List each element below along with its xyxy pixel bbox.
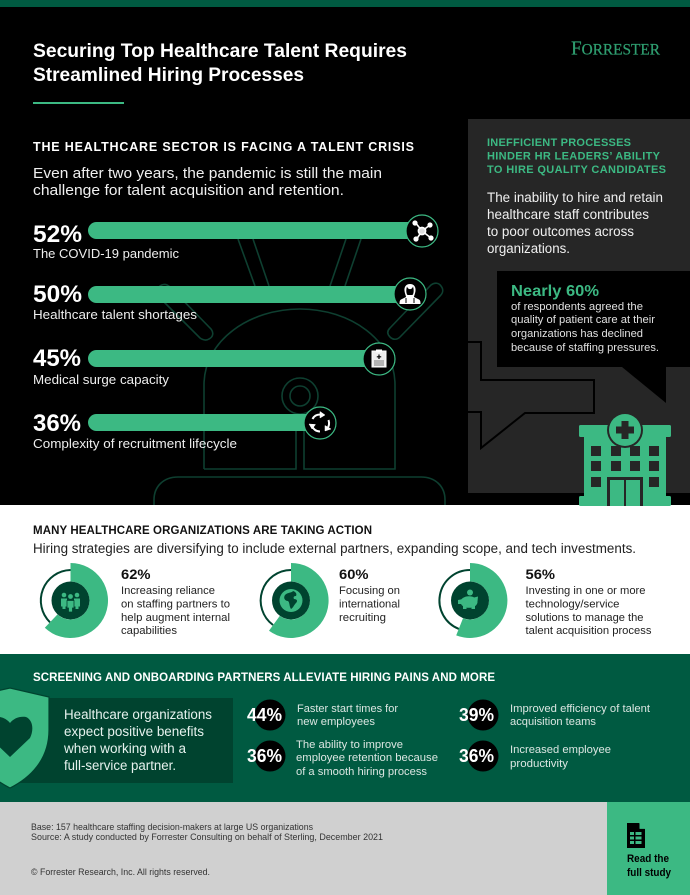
- donut: 60% international recruiting: 60%: [339, 567, 368, 582]
- base and source note: Source: A study conducted by Forrester Consulting on behalf of Sterling, December 2021: [31, 832, 383, 843]
- stat: 44%: new employees: [297, 716, 376, 728]
- stat: 36% productivity: productivity: [510, 758, 569, 770]
- base and source note: [31, 822, 383, 843]
- panel heading: HINDER HR LEADERS’ ABILITY: [487, 150, 661, 162]
- stat: 39%: [459, 700, 650, 730]
- stat: 36% productivity: 36%: [459, 746, 494, 766]
- callout box: full-service partner.: [64, 758, 176, 773]
- callout: nearly 60%: organizations has declined: [511, 328, 643, 340]
- stat: 39%: Improved efficiency of talent: [510, 703, 650, 715]
- stat: 44%: Faster start times for: [297, 703, 398, 715]
- Forrester logo: FORRESTER: [571, 38, 660, 60]
- subheading: hiring strategies: Hiring strategies are diversifying to include external partners, expanding scope, and tech investments.: [33, 541, 636, 556]
- copyright: © Forrester Research, Inc. All rights reserved.: [31, 867, 210, 878]
- donut: 62% staffing partners: on staffing partners to: [121, 598, 230, 610]
- donut: 62% staffing partners: help augment internal: [121, 612, 230, 624]
- donut: 62% staffing partners: Increasing reliance: [121, 585, 215, 597]
- call to action: read the full study: [607, 802, 690, 895]
- call to action: read the full study: full study: [627, 867, 672, 879]
- stat bar: COVID-19 pandemic: [33, 215, 438, 261]
- panel body text: healthcare staff contributes: [487, 207, 649, 222]
- stat: 36% productivity: Increased employee: [510, 744, 611, 756]
- stat bar: surge capacity: 45%: [33, 345, 81, 372]
- donut: 62% staffing partners: 62%: [121, 567, 150, 582]
- stat bar: surge capacity: Medical surge capacity: [33, 372, 170, 387]
- callout box: when working with a: [63, 741, 186, 756]
- icon: document: [627, 823, 645, 848]
- stat: 36% retention: 36%: [247, 746, 282, 766]
- intro text: Even after two years, the pandemic is still the main: [33, 165, 382, 182]
- panel: inefficient processes: [468, 119, 690, 493]
- stat bar: recruitment lifecycle: [33, 407, 336, 451]
- stat bar: surge capacity: [33, 343, 395, 387]
- title: [33, 40, 407, 86]
- panel body text: organizations.: [487, 241, 570, 256]
- stat: 36% retention: [247, 739, 438, 778]
- callout box: Healthcare organizations: [64, 707, 212, 722]
- stat: 36% retention: employee retention because: [296, 752, 438, 764]
- panel body text: The inability to hire and retain: [487, 190, 663, 205]
- panel: screening and onboarding: [0, 654, 690, 802]
- panel heading: INEFFICIENT PROCESSES: [487, 137, 631, 149]
- title: Securing Top Healthcare Talent Requires: [33, 40, 407, 62]
- stat: 44%: 44%: [247, 705, 282, 725]
- stat: 36% retention: of a smooth hiring process: [296, 766, 428, 778]
- panel body text: [487, 190, 663, 256]
- stat: 36% retention: The ability to improve: [296, 739, 403, 751]
- stat bar: talent shortages: [33, 278, 426, 322]
- donut: 60% international recruiting: [261, 563, 400, 638]
- callout box: [20, 698, 233, 783]
- callout: nearly 60%: quality of patient care at their: [511, 314, 655, 326]
- donut: 60% international recruiting: Focusing on: [339, 585, 400, 597]
- callout: nearly 60%: Nearly 60%: [511, 283, 599, 300]
- title underline: [33, 102, 124, 104]
- donut: 62% staffing partners: [41, 563, 230, 638]
- stat: 39%: acquisition teams: [510, 716, 596, 728]
- title: Streamlined Hiring Processes: [33, 64, 304, 86]
- panel heading: [487, 137, 666, 176]
- top band: [0, 0, 690, 7]
- outlined speech bubble: [468, 342, 594, 448]
- panel body text: to poor outcomes across: [487, 224, 634, 239]
- stat: 39%: 39%: [459, 705, 494, 725]
- stat: 44%: [247, 700, 398, 730]
- white section background: [0, 505, 690, 654]
- stat: 36% productivity: [459, 740, 611, 772]
- icon: shield with heart: [0, 688, 49, 788]
- heading: taking action: MANY HEALTHCARE ORGANIZATIONS ARE TAKING ACTION: [33, 525, 372, 537]
- base and source note: Base: 157 healthcare staffing decision-makers at large US organizations: [31, 822, 313, 833]
- donut: 56% technology investment: talent acquisition process: [526, 625, 652, 637]
- stat bar: COVID-19 pandemic: The COVID-19 pandemic: [33, 246, 179, 261]
- heading: talent crisis: THE HEALTHCARE SECTOR IS FACING A TALENT CRISIS: [33, 140, 414, 154]
- callout: nearly 60%: because of staffing pressures.: [511, 342, 659, 354]
- icon: hospital: [579, 412, 671, 506]
- donut: 56% technology investment: 56%: [526, 567, 555, 582]
- stat bar: COVID-19 pandemic: 52%: [33, 221, 82, 248]
- intro text: [33, 165, 382, 199]
- call to action: read the full study: Read the: [627, 853, 669, 865]
- donut: 62% staffing partners: capabilities: [121, 625, 178, 637]
- panel heading: TO HIRE QUALITY CANDIDATES: [487, 164, 666, 176]
- stat bar: talent shortages: Healthcare talent shortages: [33, 307, 198, 322]
- donut: 56% technology investment: solutions to manage the: [526, 612, 644, 624]
- donut: 56% technology investment: [439, 563, 652, 638]
- callout: nearly 60%: [497, 271, 690, 403]
- section heading: SCREENING AND ONBOARDING PARTNERS ALLEVIATE HIRING PAINS AND MORE: [33, 672, 495, 684]
- intro text: challenge for talent acquisition and retention.: [33, 182, 344, 199]
- stat bar: recruitment lifecycle: Complexity of recruitment lifecycle: [33, 436, 237, 451]
- donut: 60% international recruiting: recruiting: [339, 612, 386, 624]
- callout: nearly 60%: of respondents agreed the: [511, 301, 643, 313]
- footer: [0, 802, 690, 895]
- callout box: expect positive benefits: [64, 724, 204, 739]
- donut: 60% international recruiting: international: [339, 598, 400, 610]
- background robot illustration: [154, 239, 445, 506]
- donut: 56% technology investment: Investing in one or more: [526, 585, 646, 597]
- donut: 56% technology investment: technology/service: [526, 598, 620, 610]
- stat bar: talent shortages: 50%: [33, 281, 82, 308]
- stat bar: recruitment lifecycle: 36%: [33, 410, 81, 437]
